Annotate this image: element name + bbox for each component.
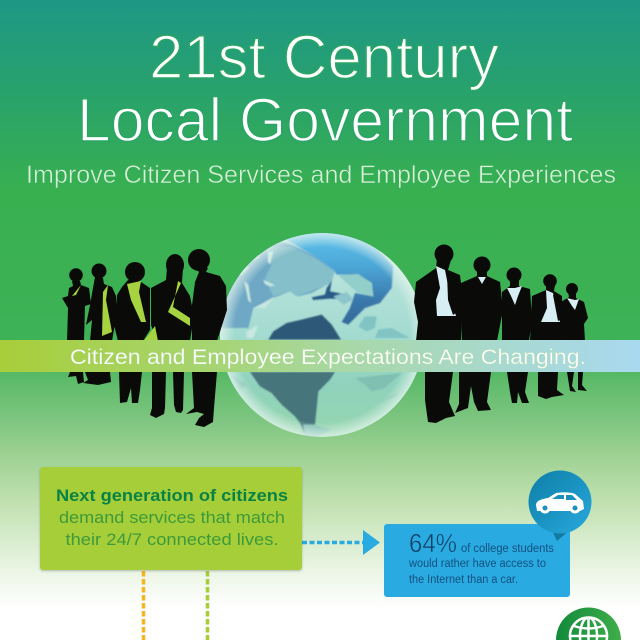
- landmass: Venezuela coast: [333, 292, 353, 305]
- employee 2: [455, 256, 503, 413]
- icon: car bubble: [528, 470, 592, 541]
- connector: blue dotted arrow: [302, 530, 380, 555]
- panel text: demand services that match: [59, 509, 285, 527]
- car: [536, 492, 584, 511]
- landmass: Antarctica: [303, 425, 332, 438]
- panel: next generation of citizens: [40, 467, 302, 570]
- employee shirts: [436, 266, 579, 322]
- statistic text: would rather have access to: [408, 558, 546, 570]
- landmass: Indonesia: [358, 316, 410, 338]
- silhouettes: citizens: [62, 249, 227, 427]
- landmass: South America: [250, 372, 335, 434]
- panel: next generation of citizens: their 24/7 connected lives.: [66, 531, 278, 549]
- employee 5: [561, 283, 588, 392]
- statistic text: [408, 543, 554, 586]
- banner text: Citizen and Employee Expectations Are Changing.: [70, 346, 586, 369]
- landmass: Africa: [234, 373, 400, 400]
- panel: 64% statistic: [384, 524, 570, 597]
- employee 4: [530, 274, 564, 399]
- connector: yellow dotted line: [142, 571, 145, 640]
- title: 21st Century: [149, 23, 499, 91]
- citizen 1: [62, 268, 91, 384]
- landmass: Brazil top: [268, 315, 341, 340]
- statistic number: 64%: [409, 528, 457, 558]
- landmass: Caribbean: [311, 281, 342, 301]
- icon: globe bubble: [556, 608, 621, 640]
- panel heading: Next generation of citizens: [56, 487, 288, 505]
- statistic text: of college students: [461, 543, 554, 555]
- subtitle: Improve Citizen Services and Employee Experiences: [26, 161, 616, 189]
- employee 1: [414, 244, 463, 423]
- citizen accents: [72, 281, 190, 341]
- citizen 3: [114, 262, 150, 403]
- landmass: Europe: [228, 251, 275, 338]
- title: [77, 23, 573, 154]
- silhouettes: employees: [414, 244, 588, 423]
- ocean: bright Pacific crescent: [283, 228, 393, 325]
- globe highlight: [220, 233, 424, 437]
- citizen 5: [186, 249, 227, 427]
- citizen 2: [83, 264, 116, 385]
- landmass: North America: [265, 246, 334, 296]
- ocean: blue-grey Atlantic: [220, 236, 335, 328]
- employee 3: [502, 268, 532, 403]
- citizen 4: [150, 254, 194, 418]
- globe: [220, 228, 424, 438]
- statistic text: the Internet than a car.: [409, 574, 518, 586]
- banner: [0, 340, 640, 372]
- landmass: Central America: [338, 274, 372, 296]
- connector: green dotted line: [206, 571, 209, 640]
- title: Local Government: [77, 86, 573, 154]
